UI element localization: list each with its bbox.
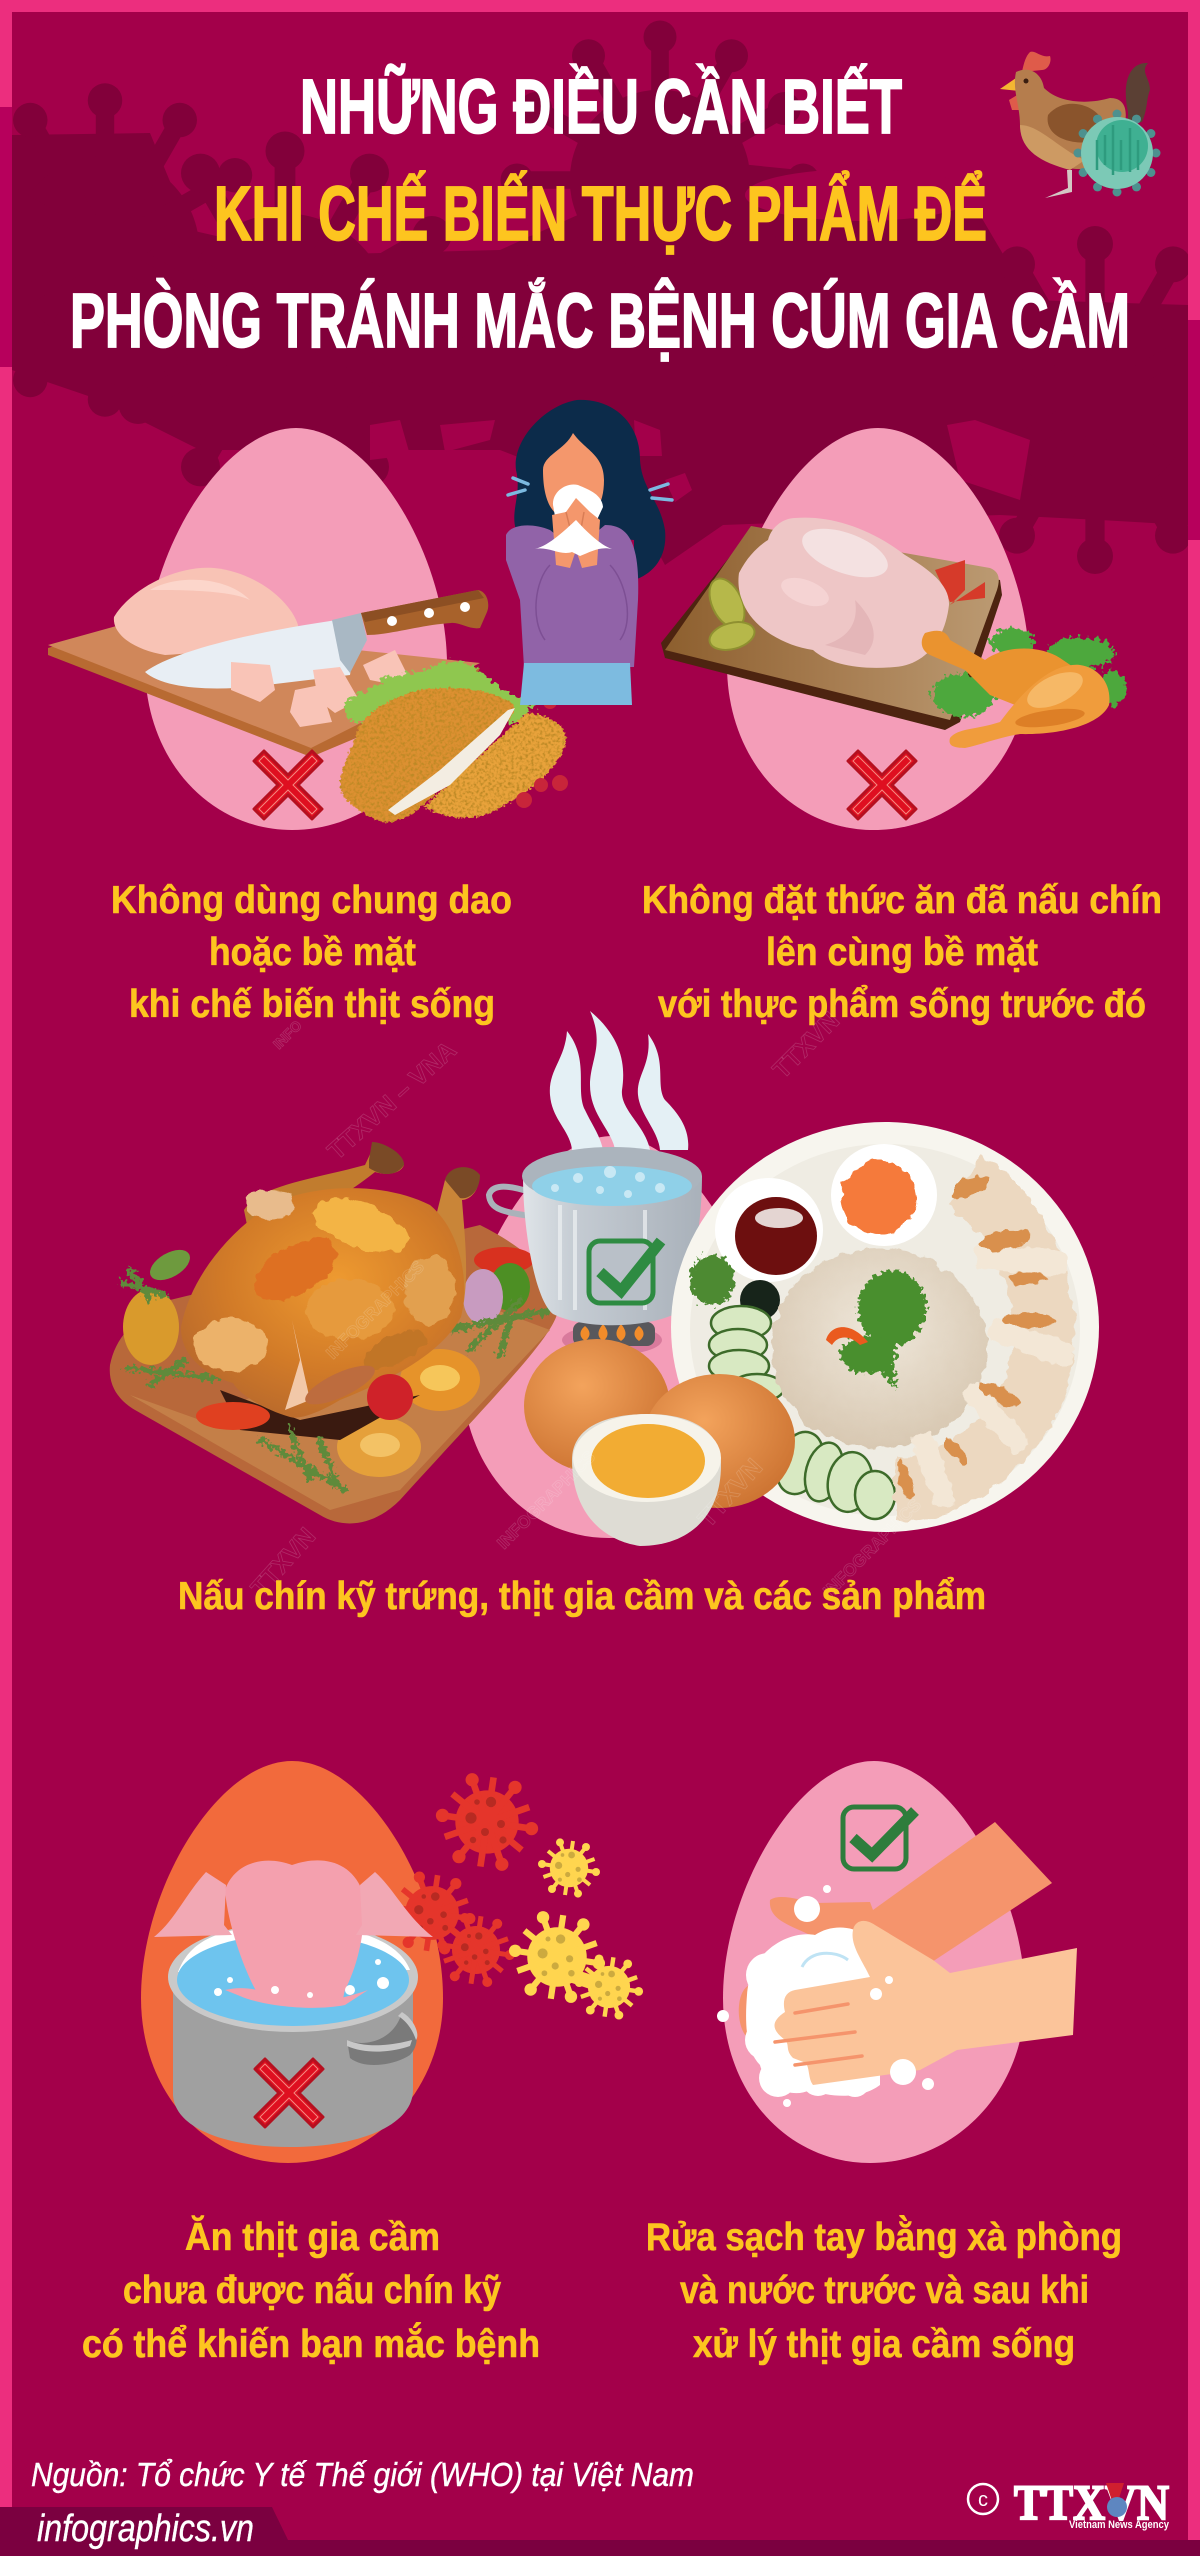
watermarks: INFOGRAPHICS [819, 1495, 925, 1601]
watermarks: TTXVN [693, 1453, 768, 1533]
illustration: wooden tray [661, 526, 1002, 730]
cilantro and chili [840, 1270, 926, 1390]
logo: TTXVN: c [978, 2489, 988, 2511]
caption: undercooked poultry: có thể khiến bạn mắc bệnh [82, 2322, 540, 2366]
caption: cooked food surface: lên cùng bề mặt [766, 931, 1038, 974]
caption: shared knife: hoặc bề mặt [209, 931, 416, 974]
illustration: back hand and arm [770, 1822, 1052, 1990]
egg background 3 [462, 1136, 764, 1538]
source line: Nguồn: Tổ chức Y tế Thế giới (WHO) tại Việt Nam [31, 2456, 694, 2493]
legs [244, 1150, 404, 1240]
caption: shared knife: khi chế biến thịt sống [129, 983, 495, 1026]
caption: undercooked poultry: Ăn thịt gia cầm [185, 2215, 440, 2259]
panel: undercooked poultry [141, 1761, 643, 2163]
skin tones [192, 1187, 455, 1377]
background: dark virus silhouettes [0, 20, 1200, 574]
side greens [689, 1255, 735, 1305]
icon: check [843, 1807, 915, 1869]
caption: cooked food surface [642, 879, 1162, 1026]
watermarks [246, 1006, 925, 1602]
caption: wash hands: Rửa sạch tay bằng xà phòng [646, 2215, 1122, 2259]
illustration: lettuce [344, 661, 535, 722]
icon: cross [848, 751, 916, 819]
pot handle [347, 2012, 417, 2065]
caption: wash hands: và nước trước và sau khi [680, 2269, 1089, 2312]
hands [552, 498, 600, 568]
illustration: raw chicken breast [114, 568, 298, 655]
caption: wash hands: xử lý thịt gia cầm sống [693, 2323, 1075, 2366]
herbs [122, 1270, 554, 1490]
board [110, 1225, 558, 1523]
icon: check in pot [589, 1241, 661, 1303]
caption: shared knife: Không dùng chung dao [111, 879, 512, 922]
egg background 4 [141, 1761, 443, 2163]
panel: shared knife warning [48, 428, 568, 830]
panel: raw chicken warning [661, 428, 1126, 830]
illustration: soap foam [745, 1928, 880, 2097]
website label: infographics.vn [37, 2508, 254, 2550]
sleeve lines [536, 565, 627, 640]
red tomato and pepper [367, 1374, 413, 1420]
illustration: front hand and arm [774, 1921, 1077, 2085]
panel: wash hands [717, 1761, 1077, 2163]
footer bar [0, 2507, 1200, 2556]
finger lines [775, 2004, 862, 2065]
logo: TTXVN [968, 2474, 1170, 2531]
egg background 5 [723, 1761, 1025, 2163]
tissue at wrists [535, 520, 612, 556]
sweater [506, 525, 638, 667]
title [70, 63, 1130, 364]
illustration: pomegranate seeds [516, 695, 568, 808]
water splash [225, 1988, 368, 2008]
yellow viruses [509, 1838, 643, 2020]
caption: cooked food surface: Không đặt thức ăn đã nấu chín [642, 879, 1162, 922]
caption: undercooked poultry: chưa được nấu chín kỹ [123, 2269, 501, 2312]
virus dots [414, 1797, 622, 2001]
globe mark [1106, 2483, 1124, 2510]
illustration: pot with raw chicken [154, 1860, 433, 2147]
caption: undercooked poultry [82, 2215, 540, 2366]
dark shadow [220, 1390, 420, 1440]
panel: cook thoroughly [110, 1011, 1099, 1546]
icon: cross [254, 751, 322, 819]
watermarks: TTXVN – VNA [322, 1036, 462, 1165]
watermarks: TTXVN [767, 1006, 845, 1084]
egg background 1 [145, 428, 447, 830]
illustration: cutting board [48, 625, 480, 757]
illustration: knife [145, 590, 488, 688]
illustration: chicken cubes [231, 650, 409, 727]
cucumber slices [709, 1306, 895, 1519]
chicken wings [154, 1872, 433, 1937]
icon: cross [255, 2059, 323, 2127]
watermarks: TTXVN [246, 1522, 321, 1602]
copyright mark [968, 2484, 998, 2514]
bubbles [214, 1959, 389, 1998]
caption: cooked food surface: với thực phẩm sống trước đó [658, 983, 1146, 1026]
face [543, 433, 604, 520]
sauce bowls [715, 1178, 823, 1282]
agency name: Vietnam News Agency [1069, 2519, 1170, 2531]
sliced chicken [894, 1170, 1077, 1509]
sneeze drops [508, 478, 672, 500]
soap bubbles [717, 1885, 934, 2107]
peppers and onion [474, 1247, 534, 1273]
illustration: chicken rice plate [671, 1122, 1099, 1532]
illustration: roast chicken on board [110, 1142, 558, 1523]
red viruses [389, 1773, 538, 1987]
watermarks: INFOGRAPHICS [322, 1257, 428, 1363]
illustration: roasted drumsticks [922, 631, 1109, 748]
illustration: fried cutlet [340, 688, 566, 822]
hair [514, 400, 665, 580]
plate [671, 1122, 1099, 1532]
jeans [520, 663, 632, 705]
title line 1: NHỮNG ĐIỀU CẦN BIẾT [300, 63, 902, 150]
potatoes [123, 1289, 179, 1365]
watermarks: INFO [270, 1017, 305, 1052]
illustration: boiled eggs [524, 1339, 795, 1546]
illustration: cilantro [932, 628, 1126, 717]
caption: cook thoroughly: Nấu chín kỹ trứng, thịt gia cầm và các sản phẩm [178, 1575, 986, 1618]
illustration: sneezing woman [506, 400, 672, 705]
caption: shared knife [111, 879, 512, 1026]
illustration: lime halves [702, 573, 758, 655]
wordmark: TTXVN [1014, 2474, 1169, 2530]
tissue behind hands [553, 484, 603, 522]
illustration: viruses [389, 1773, 643, 2020]
watermarks: INFOGRAPHICS [493, 1447, 599, 1553]
illustration: tomato [935, 560, 985, 605]
chicken body [225, 1860, 364, 2004]
rice dome [771, 1248, 987, 1448]
illustration: raw whole chicken [738, 518, 949, 668]
illustration: steam [550, 1011, 688, 1150]
caption: wash hands [646, 2215, 1122, 2366]
icon: rooster with virus [1000, 52, 1160, 198]
body [181, 1188, 464, 1418]
illustration: boiling pot [489, 1147, 702, 1355]
egg background 2 [727, 428, 1029, 830]
